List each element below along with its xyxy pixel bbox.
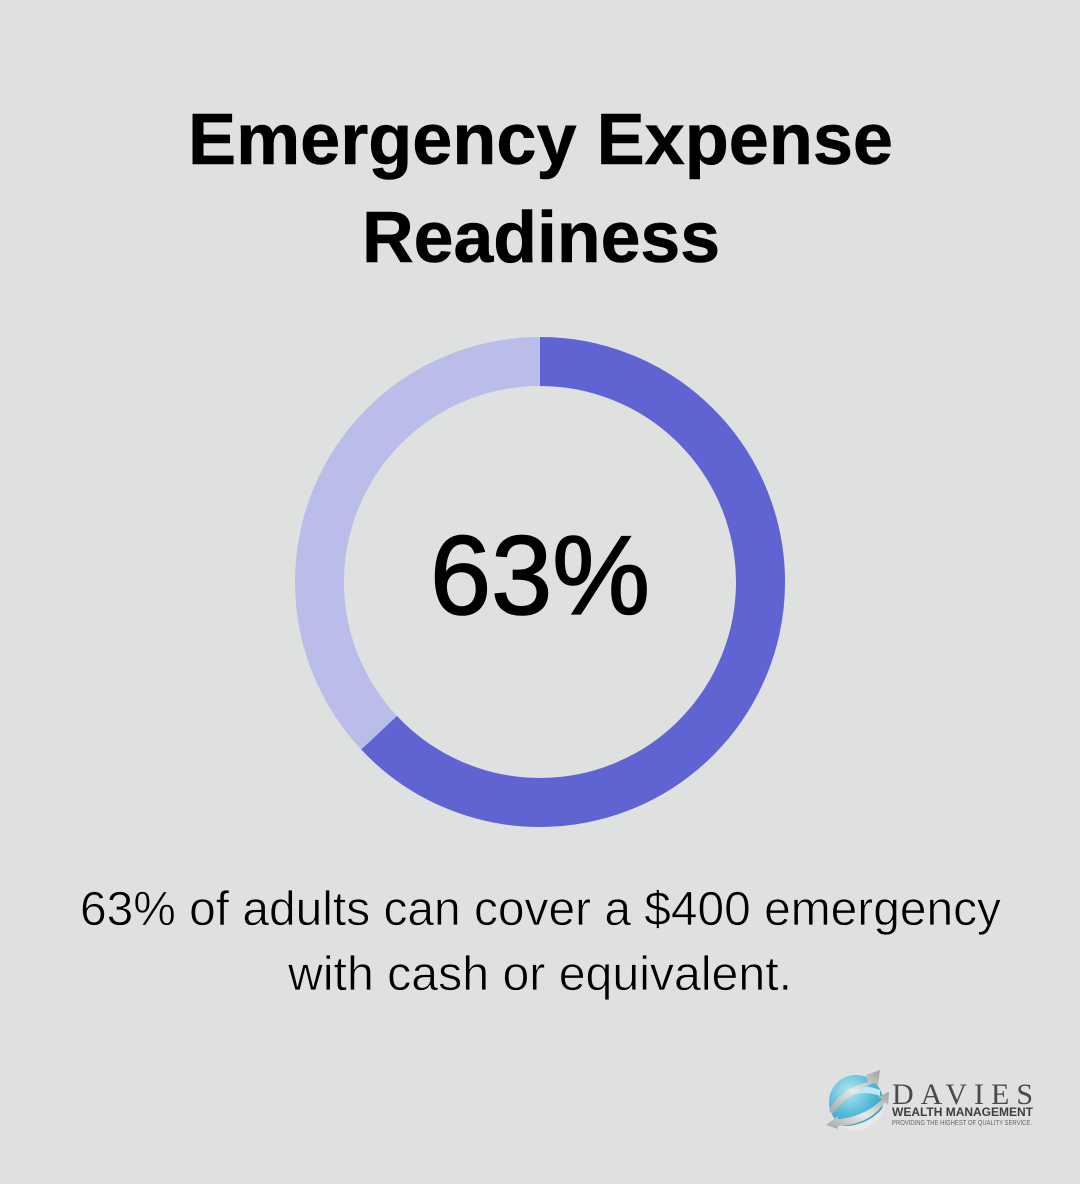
- donut remainder segment: [320, 362, 760, 802]
- logo wordmark: DAVIES: [892, 1078, 1033, 1111]
- icon: globe with arrows: [826, 1070, 889, 1131]
- title: [188, 100, 893, 278]
- logo: Davies Wealth Management: [826, 1070, 1034, 1131]
- description text: with cash or equivalent.: [287, 948, 792, 1001]
- description text: 63% of adults can cover a $400 emergency: [80, 883, 1001, 936]
- description text: [80, 883, 1001, 1001]
- title: Emergency Expense: [188, 100, 893, 180]
- logo tagline: PROVIDING THE HIGHEST OF QUALITY SERVICE.: [892, 1118, 1032, 1127]
- donut 63% segment: [320, 362, 760, 802]
- title: Readiness: [362, 198, 720, 278]
- donut chart: 63%: [320, 362, 760, 802]
- center value: 63%: [430, 513, 650, 638]
- logo subtitle: WEALTH MANAGEMENT: [892, 1105, 1034, 1119]
